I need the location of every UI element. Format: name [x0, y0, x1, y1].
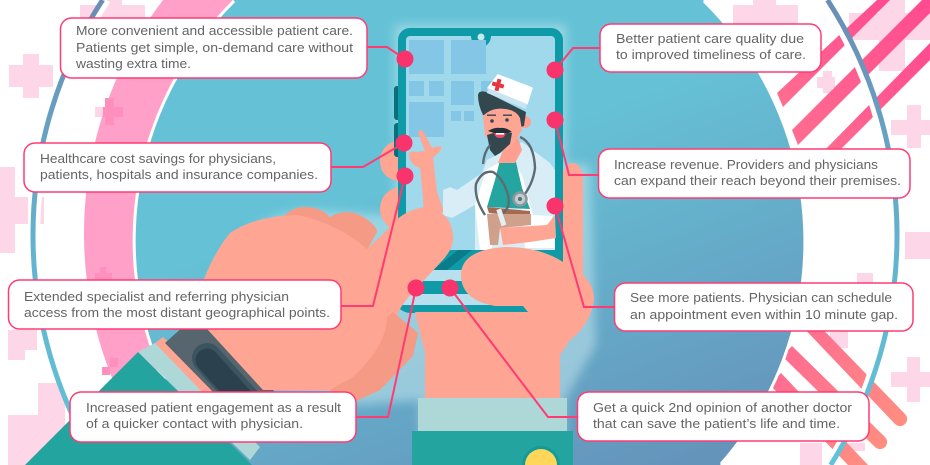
strap — [165, 325, 275, 392]
left hand — [200, 207, 453, 403]
hat red cross — [491, 78, 505, 92]
doctor pointing hand — [409, 130, 444, 212]
phone bottom bands — [399, 250, 563, 312]
neck — [498, 138, 522, 163]
beard — [487, 131, 512, 156]
callout: cost savings: patients, hospitals and insurance companies. — [40, 167, 318, 182]
callout: second opinion — [578, 392, 869, 441]
stripes top right — [777, 0, 930, 160]
connector dots — [396, 50, 564, 296]
right cuff and sleeve — [412, 398, 573, 465]
callout: patient engagement: of a quicker contact with physician. — [86, 416, 303, 431]
cuff left — [138, 343, 260, 460]
pink arc — [84, 0, 240, 400]
sleeve — [412, 431, 573, 465]
callout: convenient care: wasting extra time. — [75, 56, 191, 71]
connector lines — [331, 47, 614, 417]
right hand — [415, 247, 594, 398]
syringe — [496, 209, 506, 226]
phone body — [402, 32, 559, 309]
eyes — [487, 114, 512, 123]
coat white front right — [515, 165, 555, 248]
callout: specialist access — [8, 280, 341, 329]
callout: cost savings: Healthcare cost savings for physicians, — [40, 151, 276, 166]
callout: care quality: Better patient care quality due — [616, 31, 804, 46]
hat — [488, 75, 532, 104]
stethoscope tube end — [518, 197, 522, 201]
right fingers behind phone — [560, 163, 583, 275]
finger lobes behind phone — [380, 140, 398, 232]
hand main — [200, 207, 453, 390]
disc white edge — [134, 1, 805, 464]
shirt — [487, 160, 530, 209]
palm and forearm — [415, 247, 594, 398]
stethoscope — [476, 137, 535, 215]
watch band — [155, 325, 275, 402]
callout: care quality — [600, 24, 821, 72]
mustache — [488, 128, 512, 133]
strap slot — [207, 358, 245, 400]
hair — [478, 91, 526, 128]
left sleeve — [25, 343, 260, 465]
callout: convenient care: More convenient and accessible patient care. — [76, 23, 353, 38]
face — [483, 109, 522, 150]
screen tiles — [409, 40, 493, 137]
skin strip — [155, 337, 225, 395]
small crosses over pink arc — [95, 98, 123, 375]
callout: see more patients: an appointment even within 10 minute gap. — [630, 307, 898, 322]
callout: second opinion: that can save the patient’s life and time. — [593, 416, 840, 431]
callout: specialist access: access from the most distant geographical points. — [24, 305, 330, 320]
palm shadow — [330, 312, 418, 403]
callout: see more patients — [614, 283, 913, 331]
side buttons — [394, 86, 402, 157]
callout: revenue: can expand their reach beyond their premises. — [614, 173, 901, 188]
smartphone — [394, 32, 559, 309]
clipboard hand — [500, 215, 556, 245]
cuff — [418, 398, 567, 432]
callout: care quality: to improved timeliness of care. — [616, 47, 806, 62]
callout: patient engagement: Increased patient engagement as a result — [86, 400, 341, 415]
notch — [471, 34, 491, 47]
callout: revenue: Increase revenue. Providers and physicians — [614, 157, 879, 172]
trousers — [487, 214, 531, 245]
callout: cost savings — [24, 143, 331, 192]
doctor coat — [443, 142, 555, 250]
mouth — [494, 133, 506, 138]
hat band — [487, 88, 527, 109]
back of hand lobes — [285, 207, 377, 250]
callout: specialist access: Extended specialist and referring physician — [24, 289, 289, 304]
callout: convenient care — [60, 18, 367, 78]
callout: second opinion: Get a quick 2nd opinion of another doctor — [593, 400, 853, 415]
callout: see more patients: See more patients. Physician can schedule — [630, 290, 892, 305]
callout: revenue — [598, 149, 910, 198]
sleeve left triangle — [25, 352, 252, 465]
coat white front left — [475, 162, 500, 250]
callout: patient engagement — [70, 392, 356, 442]
sleeve button — [522, 446, 560, 465]
ear — [519, 116, 531, 128]
stripes bottom right — [770, 313, 907, 465]
teal disc — [134, 0, 805, 465]
doctor — [409, 75, 556, 250]
strap slot inner — [207, 360, 245, 402]
soft glow behind hands and phone — [261, 20, 600, 431]
callout: convenient care: Patients get simple, on-demand care without — [76, 40, 353, 55]
belt — [487, 207, 530, 217]
